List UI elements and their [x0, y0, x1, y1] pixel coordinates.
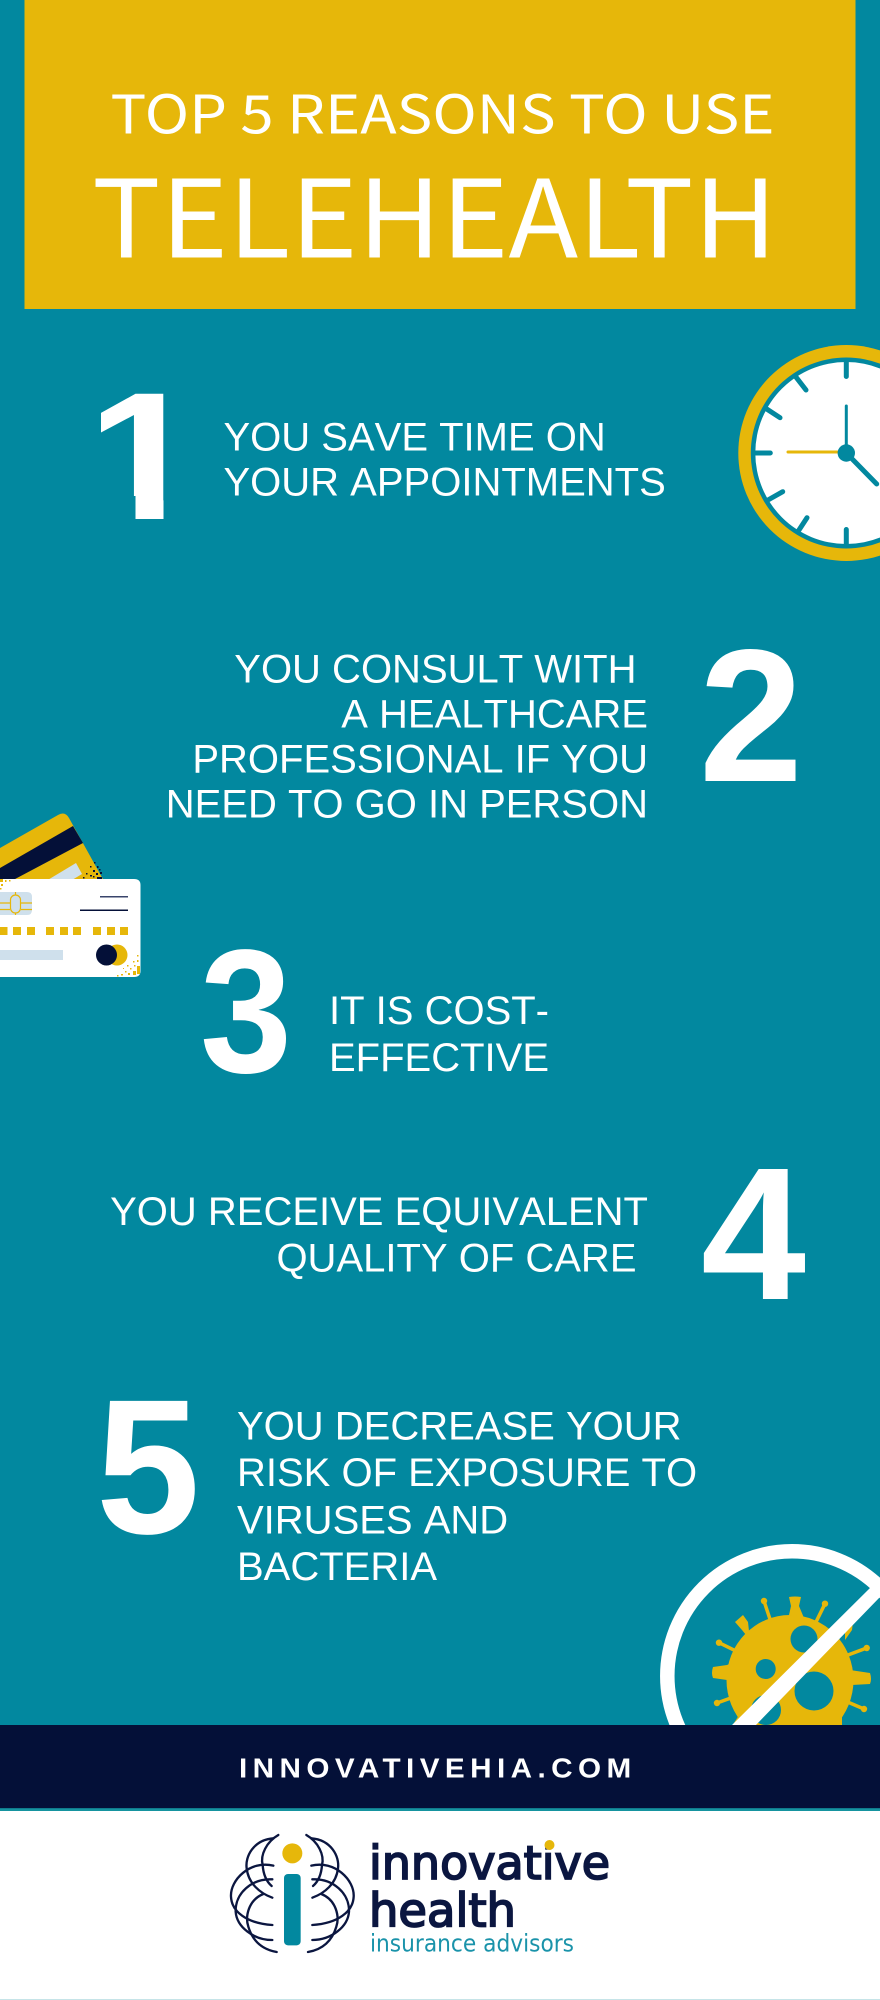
number 1: 1 [84, 354, 203, 558]
title line: top 5 reasons: TOP 5 REASONS TO USE [110, 73, 774, 150]
reason 3 text: IT IS COST- [329, 989, 549, 1033]
logo wordmark: insurance advisors [370, 1930, 574, 1958]
title banner [24, 0, 856, 309]
reason 5 text: RISK OF EXPOSURE TO [237, 1451, 697, 1495]
reason 3 [200, 914, 549, 1110]
reason 4 [110, 1129, 806, 1340]
icon: clock [738, 345, 880, 561]
brain arcs [231, 1835, 354, 1952]
logo mark [231, 1835, 354, 1952]
logo wordmark: innovative [369, 1836, 610, 1890]
reason 2 text: A HEALTHCARE [341, 692, 648, 736]
website url: INNOVATIVEHIA.COM [239, 1753, 631, 1784]
reason 2 text: NEED TO GO IN PERSON [166, 783, 648, 827]
logo wordmark: health [369, 1884, 516, 1938]
reason 5 text: BACTERIA [237, 1545, 437, 1589]
title line: telehealth: TELEHEALTH [92, 134, 777, 290]
reason 5 [96, 1359, 697, 1589]
reason 1 text: YOU SAVE TIME ON [224, 416, 606, 460]
reason 5 text: VIRUSES AND [237, 1498, 508, 1542]
reason 2 text: PROFESSIONAL IF YOU [192, 738, 648, 782]
logo area [0, 1811, 880, 2000]
reason 1 [84, 354, 666, 558]
back card [0, 814, 104, 881]
front card [0, 879, 140, 977]
reason 3 text: EFFECTIVE [329, 1036, 549, 1080]
number 2: 2 [699, 611, 803, 822]
reason 2 [166, 611, 803, 827]
reason 5 text: YOU DECREASE YOUR [237, 1404, 682, 1448]
virus [712, 1596, 871, 1745]
reason 4 text: YOU RECEIVE EQUIVALENT [110, 1190, 648, 1234]
logo wordmark [369, 1836, 610, 1958]
number 3: 3 [200, 914, 292, 1110]
number 4: 4 [701, 1129, 806, 1340]
reason 4 text: QUALITY OF CARE [276, 1237, 636, 1281]
reason 2 text: YOU CONSULT WITH [234, 647, 636, 691]
number 5: 5 [96, 1359, 200, 1574]
icon: virus with prohibition sign [667, 1551, 880, 1801]
reason 1 text: YOUR APPOINTMENTS [224, 461, 666, 505]
icon: credit cards [0, 814, 140, 977]
prohibition slash [731, 1578, 880, 1726]
footer band [0, 1725, 880, 1811]
